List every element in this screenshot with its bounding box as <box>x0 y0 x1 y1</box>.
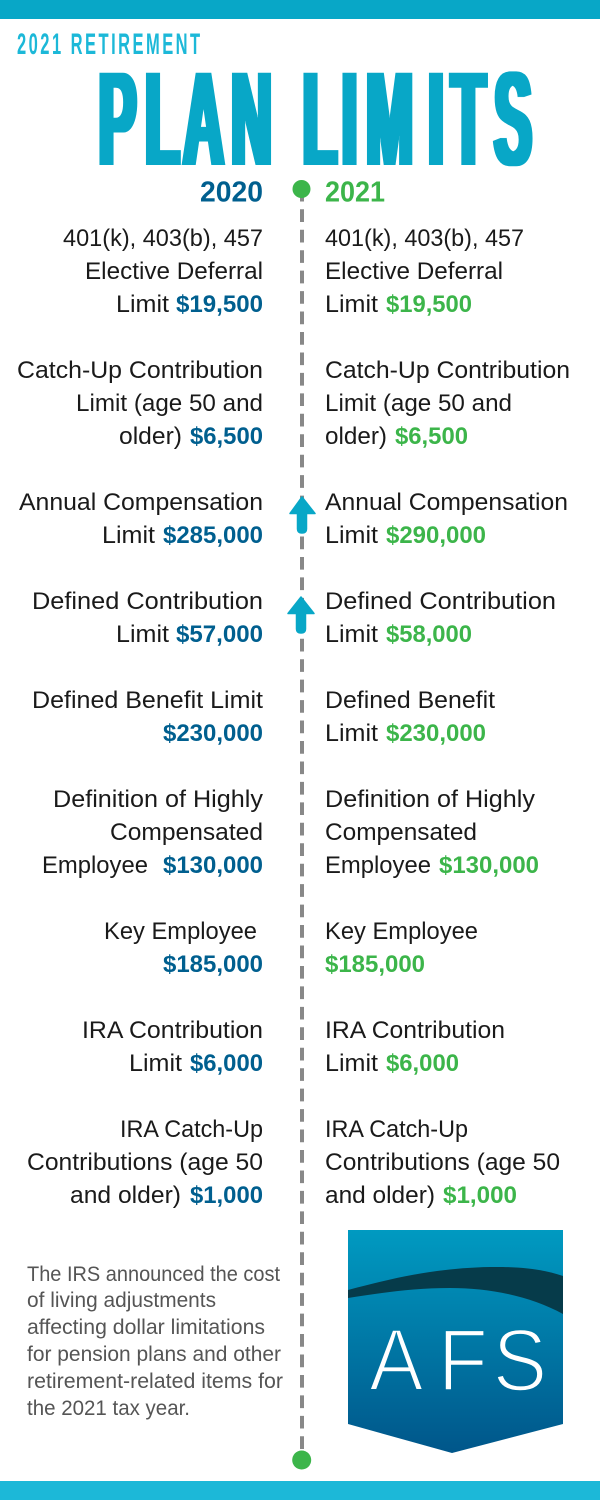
2020: highly compensated employee: Compensated <box>110 819 263 846</box>
2021: IRA contribution <box>325 1017 505 1077</box>
2020: defined contribution: Limit <box>116 621 169 648</box>
2020: catch-up contribution <box>17 357 263 450</box>
2021: elective deferral: $19,500 <box>386 291 472 318</box>
2020: elective deferral <box>63 225 263 318</box>
2021: catch-up contribution: Limit (age 50 and <box>325 390 512 417</box>
2020: key employee: Key Employee <box>104 918 257 945</box>
icon: up arrow, defined contribution <box>288 597 314 633</box>
2021: key employee: $185,000 <box>325 951 425 978</box>
2020: IRA catch-up <box>27 1116 263 1209</box>
2021: catch-up contribution: older) <box>325 423 387 450</box>
2021: IRA contribution: Limit <box>325 1050 378 1077</box>
2020: highly compensated employee <box>42 786 264 879</box>
2021: highly compensated employee: Compensated <box>325 819 477 846</box>
2020: defined benefit: Defined Benefit Limit <box>32 687 263 714</box>
2020: IRA contribution <box>82 1017 263 1077</box>
2021: highly compensated employee <box>325 786 539 879</box>
2021: catch-up contribution <box>325 357 570 450</box>
2021: IRA catch-up <box>325 1116 560 1209</box>
2020: elective deferral: Elective Deferral <box>85 258 263 285</box>
2021: annual compensation: Limit <box>325 522 378 549</box>
2021: IRA contribution: $6,000 <box>386 1050 459 1077</box>
2021: IRA contribution: IRA Contribution <box>325 1017 505 1044</box>
2020: catch-up contribution: older) <box>119 423 182 450</box>
2020: IRA contribution: $6,000 <box>190 1050 263 1077</box>
2021: annual compensation <box>325 489 568 549</box>
panel: 2021 limits <box>325 225 570 1209</box>
footnote text: of living adjustments <box>27 1289 216 1312</box>
logo lettering: AFS <box>369 1312 547 1410</box>
2020: IRA catch-up: IRA Catch-Up <box>120 1116 263 1143</box>
2020: annual compensation <box>19 489 263 549</box>
footnote text: The IRS announced the cost <box>27 1263 280 1286</box>
icon: up arrow, compensation limit <box>290 497 315 533</box>
footnote text: retirement-related items for <box>27 1370 283 1393</box>
2020: catch-up contribution: Limit (age 50 and <box>76 390 263 417</box>
logo: AFS shield <box>348 1230 563 1453</box>
2021: highly compensated employee: $130,000 <box>439 852 539 879</box>
2020: elective deferral: $19,500 <box>176 291 263 318</box>
panel: 2020 limits <box>17 225 264 1209</box>
2020: key employee: $185,000 <box>163 951 263 978</box>
2020: highly compensated employee: $130,000 <box>163 852 263 879</box>
title: PLAN LIMITS <box>99 44 532 194</box>
2020: highly compensated employee: Definition of Highly <box>53 786 264 813</box>
2021: defined contribution: $58,000 <box>386 621 472 648</box>
2020: IRA catch-up: and older) <box>70 1182 181 1209</box>
subtitle: 2021 RETIREMENT <box>17 28 200 61</box>
logo wave <box>348 1267 563 1314</box>
2020: IRA catch-up: $1,000 <box>190 1182 263 1209</box>
2020: highly compensated employee: Employee <box>42 852 148 879</box>
2021: key employee: Key Employee <box>325 918 478 945</box>
2021: catch-up contribution: Catch-Up Contribution <box>325 357 570 384</box>
2021: IRA catch-up: $1,000 <box>443 1182 517 1209</box>
2020: defined contribution <box>32 588 263 648</box>
2020: defined contribution: $57,000 <box>176 621 263 648</box>
2021: elective deferral: Limit <box>325 291 378 318</box>
2020: annual compensation: $285,000 <box>163 522 263 549</box>
2021: defined contribution <box>325 588 556 648</box>
footnote text <box>27 1263 283 1420</box>
2021: catch-up contribution: $6,500 <box>395 423 468 450</box>
2020: IRA contribution: Limit <box>129 1050 182 1077</box>
2020: key employee <box>104 918 263 978</box>
2021: IRA catch-up: IRA Catch-Up <box>325 1116 468 1143</box>
footnote text: affecting dollar limitations <box>27 1316 265 1339</box>
2021: annual compensation: Annual Compensation <box>325 489 568 516</box>
2021: defined contribution: Limit <box>325 621 378 648</box>
2021: defined benefit: Defined Benefit <box>325 687 495 714</box>
2021: highly compensated employee: Definition of Highly <box>325 786 536 813</box>
2021: highly compensated employee: Employee <box>325 852 431 879</box>
2021: elective deferral: 401(k), 403(b), 457 <box>325 225 524 252</box>
2021: defined benefit <box>325 687 495 747</box>
column heading: 2020: 2020 <box>200 176 263 208</box>
2020: elective deferral: 401(k), 403(b), 457 <box>63 225 263 252</box>
2020: IRA contribution: IRA Contribution <box>82 1017 263 1044</box>
2021: defined benefit: $230,000 <box>386 720 486 747</box>
2020: defined contribution: Defined Contribution <box>32 588 263 615</box>
footnote text: for pension plans and other <box>27 1343 281 1366</box>
2020: catch-up contribution: Catch-Up Contribution <box>17 357 263 384</box>
2020: defined benefit <box>32 687 263 747</box>
2020: defined benefit: $230,000 <box>163 720 263 747</box>
2021: defined contribution: Defined Contribution <box>325 588 556 615</box>
2021: defined benefit: Limit <box>325 720 378 747</box>
timeline <box>292 180 311 1470</box>
2021: IRA catch-up: Contributions (age 50 <box>325 1149 560 1176</box>
2020: annual compensation: Limit <box>102 522 155 549</box>
2020: elective deferral: Limit <box>116 291 169 318</box>
2021: key employee <box>325 918 478 978</box>
2021: IRA catch-up: and older) <box>325 1182 435 1209</box>
2020: annual compensation: Annual Compensation <box>19 489 263 516</box>
2020: catch-up contribution: $6,500 <box>190 423 263 450</box>
2021: annual compensation: $290,000 <box>386 522 486 549</box>
column heading: 2021: 2021 <box>325 176 385 208</box>
bottom band <box>0 1481 600 1500</box>
top band <box>0 0 600 19</box>
2021: elective deferral: Elective Deferral <box>325 258 503 285</box>
2020: IRA catch-up: Contributions (age 50 <box>27 1149 263 1176</box>
2021: elective deferral <box>325 225 524 318</box>
footnote text: the 2021 tax year. <box>27 1397 190 1420</box>
